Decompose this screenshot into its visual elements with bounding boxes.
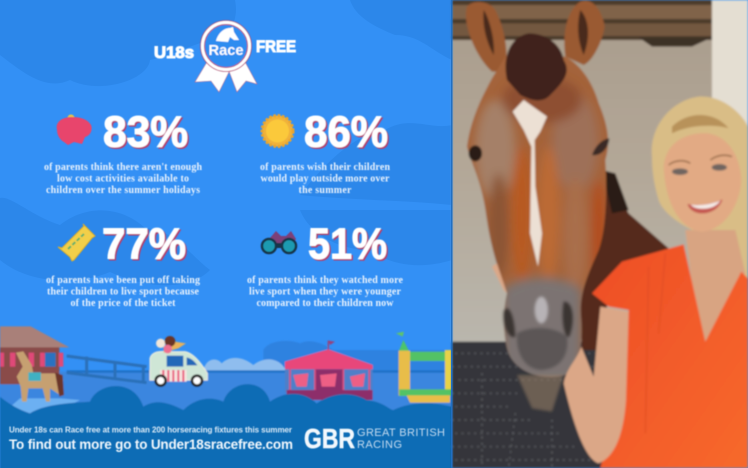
icon: stable xyxy=(0,326,69,384)
icon: rosette medal: Race xyxy=(208,42,244,59)
text: 77% description: of parents have been put off taking xyxy=(46,275,200,286)
scene: summer fair illustration xyxy=(0,326,452,468)
text: 77% description: their children to live sport because xyxy=(47,286,200,298)
woman hair xyxy=(652,97,748,300)
ground xyxy=(0,372,452,432)
photo: woman with horse in stable xyxy=(452,0,748,468)
number: 83%: 83% xyxy=(104,109,190,158)
icon: ice cream van xyxy=(150,336,207,386)
text: footer line 1: Under 18s can Race free at more than 200 horseracing fixtures this summer xyxy=(9,426,292,434)
far clouds xyxy=(263,341,452,372)
white pillar xyxy=(712,0,748,140)
horse ears xyxy=(466,2,507,72)
logo text: U18s: U18s xyxy=(154,44,194,62)
horse whiskers xyxy=(517,375,564,412)
fence xyxy=(67,356,147,383)
horse neck xyxy=(579,167,669,350)
footer text block xyxy=(9,426,293,452)
text: 83% description xyxy=(44,162,202,196)
stat: 83% xyxy=(44,108,202,196)
icon: sun xyxy=(262,116,293,146)
horse mane xyxy=(506,33,567,100)
logo: U18s Race Free rosette xyxy=(154,20,296,92)
number: 77%: 77% xyxy=(104,221,188,270)
text: footer line 2: To find out more go to Under18sracefree.com xyxy=(9,437,293,452)
stat: 51% xyxy=(247,220,404,309)
dark cloud band xyxy=(0,384,452,468)
logo text: Racing: RACING xyxy=(357,439,402,451)
horse blaze xyxy=(513,100,547,267)
horse muzzle xyxy=(503,297,573,370)
horizon line xyxy=(67,370,452,373)
text: 51% description: live sport when they were younger xyxy=(249,286,402,298)
text: 51% description xyxy=(247,275,404,309)
horse head xyxy=(462,53,612,383)
number: 86%: 86% xyxy=(304,108,388,156)
logo text: FREE: FREE xyxy=(256,37,296,56)
text: 86% description: of parents wish their children xyxy=(260,162,390,173)
woman neck and chest xyxy=(685,230,745,342)
number: 51%: 51% xyxy=(308,220,387,268)
woman fingers xyxy=(492,263,507,293)
icon: ticket xyxy=(58,224,95,261)
text: 86% description: the summer xyxy=(298,185,352,196)
text: 77% description: of the price of the ticket xyxy=(70,298,176,309)
icon: binoculars xyxy=(262,231,296,253)
logo text: Great British: GREAT BRITISH xyxy=(357,427,445,439)
panel: blue infographic background xyxy=(0,0,452,468)
divider: blue left edge of photo xyxy=(451,0,452,468)
number: 83%: 83% xyxy=(103,108,188,156)
woman arm xyxy=(564,307,629,463)
horse shadow xyxy=(7,398,80,415)
logo mark: GBR: GBR xyxy=(304,423,355,454)
text: 83% description: of parents think there aren't enough xyxy=(44,162,202,173)
icon: bouncy castle xyxy=(396,332,452,403)
text: 86% description: would play outside more over xyxy=(260,174,390,184)
icon: carousel xyxy=(285,341,373,400)
text: 83% description: children over the summer holidays xyxy=(46,185,200,196)
text: 83% description: low cost activities available to xyxy=(57,174,189,184)
text: 86% description xyxy=(260,162,390,196)
icon: horse xyxy=(16,351,64,402)
number: 77%: 77% xyxy=(102,220,186,268)
wooden beams xyxy=(452,0,712,40)
text: 51% description: of parents think they watched more xyxy=(247,275,404,286)
logo: Great British Racing xyxy=(304,423,445,454)
woman smile xyxy=(687,199,723,213)
icon: ribbon tails xyxy=(195,60,257,92)
number: 51%: 51% xyxy=(310,221,388,270)
stat: 77% xyxy=(46,220,200,309)
text: 77% description xyxy=(46,275,200,309)
icon: rosette medal xyxy=(200,20,252,72)
horse eyes xyxy=(469,145,482,161)
white distant clouds xyxy=(203,358,287,372)
number: 86%: 86% xyxy=(306,109,390,158)
woman face xyxy=(664,133,741,232)
stable wall xyxy=(452,0,748,468)
horse blanket xyxy=(452,342,602,468)
woman dress xyxy=(592,244,748,468)
stat: 86% xyxy=(260,108,390,196)
text: 51% description: compared to their children now xyxy=(256,298,394,309)
woman eyes xyxy=(672,168,688,175)
icon: piggy bank xyxy=(57,114,92,145)
